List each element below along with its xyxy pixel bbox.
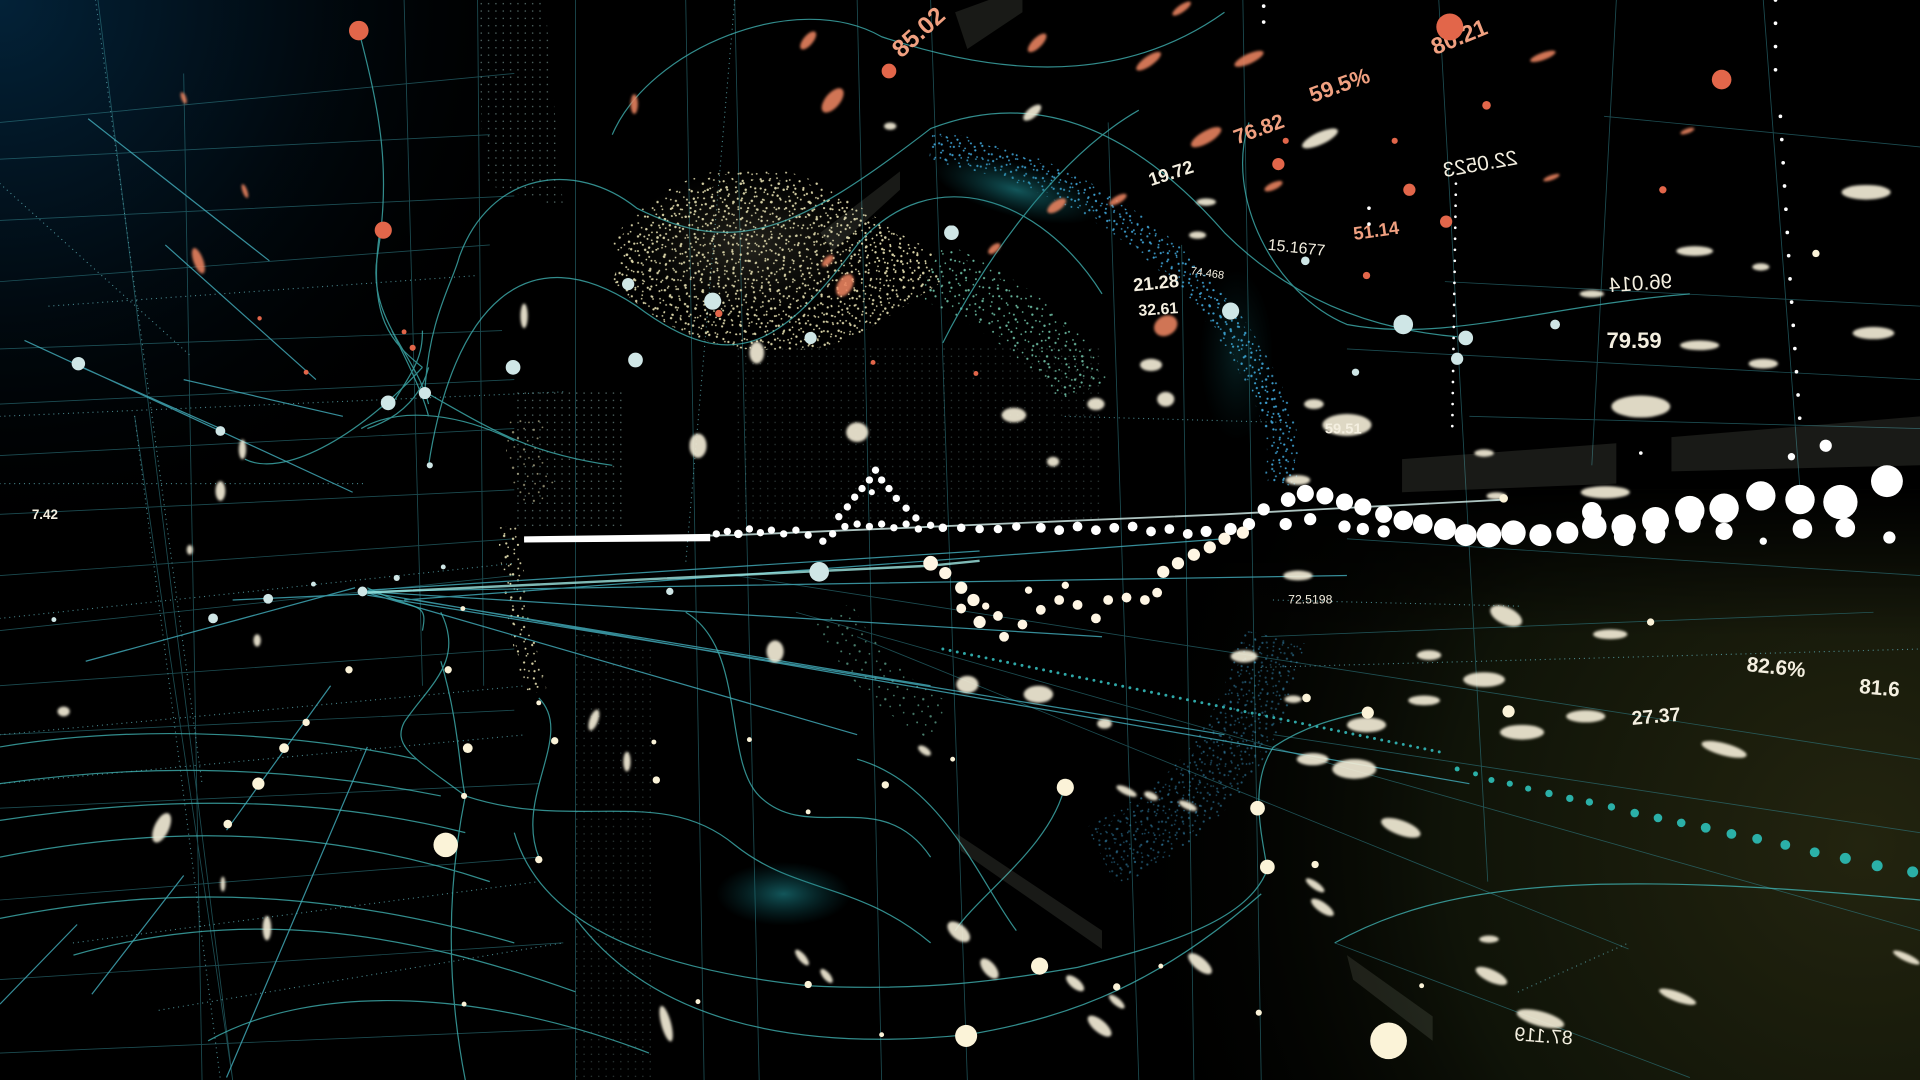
sharp numeric labels: 74.468 <box>1190 265 1225 282</box>
orange sharp numbers: 59.5% <box>1306 63 1373 108</box>
orange sharp numbers: 76.82 <box>1231 110 1287 149</box>
sharp numeric labels: 21.28 <box>1132 270 1180 295</box>
central bright baseline <box>367 500 1506 593</box>
dotted particle globe <box>508 147 1283 857</box>
sharp numeric labels: 87.119 <box>1514 1023 1573 1049</box>
particle lattice walls <box>478 0 1102 1078</box>
orange data points <box>257 13 1731 376</box>
secondary white data point series <box>923 527 1249 642</box>
orange sharp numbers <box>887 2 1491 244</box>
orange sharp numbers: 80.21 <box>1427 14 1491 60</box>
pale blue nodes <box>51 225 1560 623</box>
sharp numeric labels: 15.1677 <box>1267 237 1326 260</box>
sharp numeric labels: 59.51 <box>1325 421 1362 437</box>
white dotted vertical columns <box>1264 0 1800 459</box>
sharp numeric labels: 7.42 <box>32 507 58 522</box>
sharp numeric labels: 19.72 <box>1146 156 1196 190</box>
faint translucent bands <box>820 0 1920 1041</box>
sharp numeric labels: 96.014 <box>1608 270 1673 297</box>
sharp numeric labels: 81.6 <box>1858 675 1901 702</box>
scattered node points <box>51 225 1820 1059</box>
sharp numeric labels: 72.5198 <box>1288 593 1333 607</box>
teal glow clouds <box>624 142 1273 926</box>
cream continents of particles <box>508 179 1084 722</box>
teal dotted trend line <box>943 649 1918 877</box>
sharp numeric labels: 79.59 <box>1607 328 1662 353</box>
sharp numeric labels: 82.6% <box>1746 653 1807 682</box>
blue particle arc <box>931 147 1283 484</box>
blue lower particle arc <box>1102 637 1273 857</box>
sharp numeric labels: 22.0523 <box>1441 146 1519 182</box>
sharp numeric labels: 32.61 <box>1138 300 1179 320</box>
main white data point series <box>713 440 1903 547</box>
orange sharp numbers: 51.14 <box>1352 217 1401 244</box>
orange-tinted blurred labels <box>179 0 1695 340</box>
straight teal rays <box>0 119 1469 1078</box>
sharp numeric labels: 27.37 <box>1631 704 1682 730</box>
cream nodes <box>223 250 1820 1059</box>
orange sharp numbers: 85.02 <box>887 2 951 63</box>
